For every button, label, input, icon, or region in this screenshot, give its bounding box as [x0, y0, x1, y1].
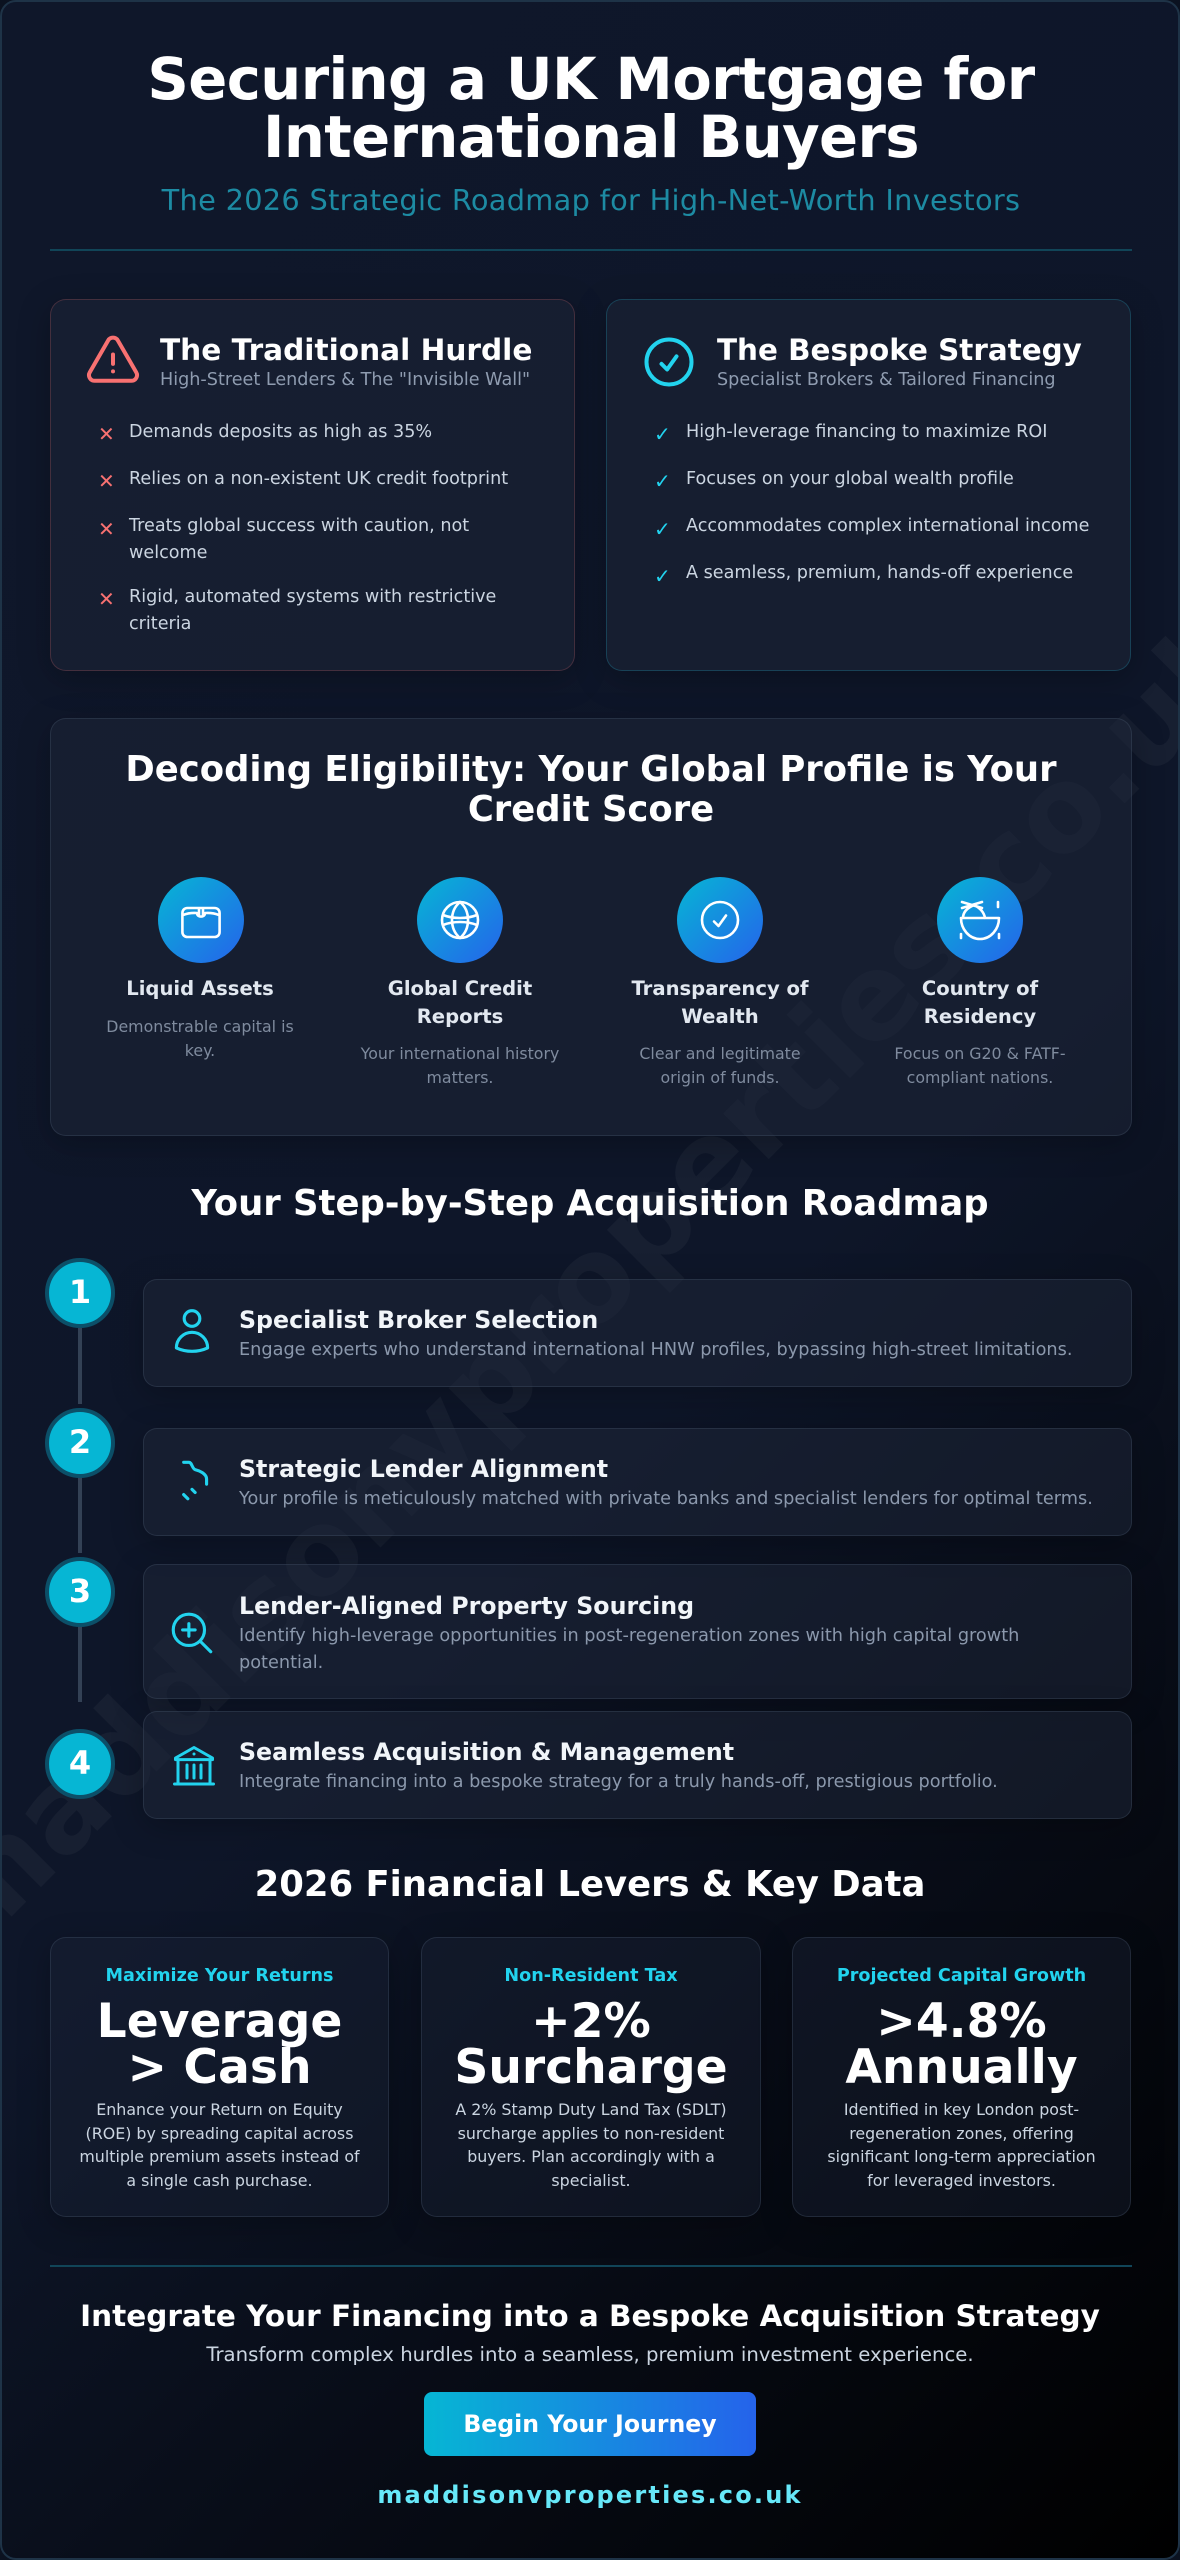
item: liquid assets	[106, 877, 294, 1060]
label: Country of	[922, 977, 1038, 1000]
panel: the traditional hurdle	[50, 299, 575, 671]
item: country of residency	[894, 877, 1066, 1087]
big figure	[454, 1994, 728, 2095]
icon: globe	[417, 877, 503, 963]
description	[455, 2100, 727, 2190]
description: origin of funds.	[660, 1068, 780, 1087]
description: matters.	[427, 1068, 493, 1087]
list: hurdles: Demands deposits as high as 35%	[129, 422, 432, 442]
list: hurdles: ✕	[98, 517, 115, 541]
icon: check circle	[644, 338, 694, 386]
heading: The Bespoke Strategy	[717, 333, 1082, 367]
label: Residency	[924, 1005, 1036, 1028]
description: compliant nations.	[907, 1068, 1053, 1087]
subheading: Specialist Brokers & Tailored Financing	[717, 370, 1056, 390]
description: potential.	[239, 1653, 323, 1673]
step number 4: 4	[69, 1744, 91, 1782]
title	[147, 46, 1035, 171]
list: hurdles: Treats global success with caution, not	[129, 516, 469, 536]
step number 2: 2	[69, 1423, 91, 1461]
description: buyers. Plan accordingly with a	[467, 2147, 715, 2166]
list: strategy: ✓	[654, 422, 671, 446]
description: a single cash purchase.	[126, 2171, 313, 2190]
list: hurdles: criteria	[129, 614, 191, 634]
list: hurdles: ✕	[98, 587, 115, 611]
heading: Integrate Your Financing into a Bespoke Acquisition Strategy	[80, 2299, 1100, 2333]
label: Projected Capital Growth	[837, 1966, 1086, 1986]
description: surcharge applies to non-resident	[458, 2124, 724, 2143]
icon: country	[937, 877, 1023, 963]
list: strategy	[654, 422, 1089, 588]
step number 2	[45, 1408, 115, 1478]
label: Transparency of	[631, 977, 809, 1000]
title: Specialist Broker Selection	[239, 1306, 598, 1334]
list: hurdles: ✕	[98, 422, 115, 446]
list: hurdles: ✕	[98, 469, 115, 493]
description: regeneration zones, offering	[849, 2124, 1074, 2143]
icon: magnifier plus	[172, 1612, 212, 1654]
list: strategy: A seamless, premium, hands-off experience	[686, 563, 1073, 583]
icon: warning triangle	[86, 336, 140, 383]
icon: link fragments	[182, 1460, 208, 1500]
step card 2	[143, 1428, 1132, 1536]
description: key.	[185, 1041, 215, 1060]
list: strategy: ✓	[654, 469, 671, 493]
description	[360, 1044, 559, 1087]
label: Global Credit	[388, 977, 532, 1000]
step number 3: 3	[69, 1572, 91, 1610]
description: Your profile is meticulously matched with private banks and specialist lenders for optimal terms.	[239, 1489, 1093, 1509]
title: Strategic Lender Alignment	[239, 1455, 608, 1483]
button	[424, 2392, 756, 2456]
list: strategy: Focuses on your global wealth profile	[686, 469, 1014, 489]
icon: person	[174, 1309, 210, 1353]
icon: check circle	[677, 877, 763, 963]
label: Liquid Assets	[126, 977, 274, 1000]
description: Clear and legitimate	[639, 1044, 801, 1063]
website url: maddisonvproperties.co.uk	[377, 2481, 803, 2509]
big figure	[97, 1994, 342, 2095]
label: Wealth	[681, 1005, 759, 1028]
description: Demonstrable capital is	[106, 1017, 294, 1036]
stat card: capital growth	[792, 1937, 1131, 2217]
description: Enhance your Return on Equity	[96, 2100, 343, 2119]
big figure: +2%	[531, 1994, 651, 2049]
list: strategy: High-leverage financing to maximize ROI	[686, 422, 1047, 442]
description: multiple premium assets instead of	[79, 2147, 360, 2166]
label: Maximize Your Returns	[105, 1966, 334, 1986]
label: Reports	[417, 1005, 503, 1028]
description	[639, 1044, 801, 1087]
description: specialist.	[551, 2171, 631, 2190]
description: Integrate financing into a bespoke strategy for a truly hands-off, prestigious portfolio.	[239, 1772, 998, 1792]
heading: Credit Score	[468, 789, 714, 830]
subheading: Transform complex hurdles into a seamless, premium investment experience.	[206, 2343, 974, 2366]
big figure: Surcharge	[454, 2040, 728, 2095]
step card 4	[143, 1711, 1132, 1819]
description	[106, 1017, 294, 1060]
description: (ROE) by spreading capital across	[86, 2124, 353, 2143]
list: strategy: ✓	[654, 564, 671, 588]
call to action	[80, 2299, 1100, 2509]
list: strategy: ✓	[654, 517, 671, 541]
stat card: surcharge	[421, 1937, 761, 2217]
step card 3	[143, 1564, 1132, 1699]
step number 1: 1	[69, 1273, 91, 1311]
subtitle: The 2026 Strategic Roadmap for High-Net-Worth Investors	[162, 183, 1020, 217]
title: Seamless Acquisition & Management	[239, 1738, 734, 1766]
label	[631, 977, 809, 1028]
heading: roadmap: Your Step-by-Step Acquisition Roadmap	[191, 1183, 989, 1224]
heading: The Traditional Hurdle	[160, 333, 532, 367]
list: hurdles	[98, 422, 508, 634]
title: International Buyers	[263, 104, 919, 171]
roadmap timeline	[45, 1258, 115, 1799]
item: global credit reports	[360, 877, 559, 1087]
label	[388, 977, 532, 1028]
label	[922, 977, 1038, 1028]
heading: Decoding Eligibility: Your Global Profile is Your	[125, 749, 1057, 790]
big figure: >4.8%	[876, 1994, 1047, 2049]
big figure: Leverage	[97, 1994, 342, 2049]
item: transparency of wealth	[631, 877, 809, 1087]
description: for leveraged investors.	[867, 2171, 1056, 2190]
description: Identified in key London post-	[844, 2100, 1079, 2119]
header	[147, 46, 1035, 217]
big figure: > Cash	[127, 2040, 312, 2095]
description: A 2% Stamp Duty Land Tax (SDLT)	[455, 2100, 727, 2119]
list: strategy: Accommodates complex international income	[686, 516, 1089, 536]
big figure: Annually	[845, 2040, 1078, 2095]
step number 4	[45, 1729, 115, 1799]
heading	[125, 749, 1057, 830]
title: Lender-Aligned Property Sourcing	[239, 1592, 694, 1620]
description	[239, 1626, 1019, 1673]
step number 1	[45, 1258, 115, 1328]
list: hurdles: welcome	[129, 543, 208, 563]
panel: decoding eligibility	[50, 718, 1132, 1136]
description: significant long-term appreciation	[827, 2147, 1096, 2166]
description	[894, 1044, 1066, 1087]
label: Non-Resident Tax	[504, 1966, 678, 1986]
list: hurdles: Relies on a non-existent UK credit footprint	[129, 469, 508, 489]
big figure	[845, 1994, 1078, 2095]
description: Identify high-leverage opportunities in post-regeneration zones with high capital growth	[239, 1626, 1019, 1646]
heading: financial levers: 2026 Financial Levers & Key Data	[255, 1864, 925, 1905]
list: hurdles: Rigid, automated systems with restrictive	[129, 587, 496, 607]
title: Securing a UK Mortgage for	[147, 46, 1035, 113]
panel: the bespoke strategy	[606, 299, 1131, 671]
description: Your international history	[361, 1044, 559, 1063]
step number 3	[45, 1557, 115, 1627]
icon: liquid assets	[158, 877, 244, 963]
button: Begin Your Journey	[463, 2410, 717, 2438]
stat card: leverage	[50, 1937, 389, 2217]
step card 1	[143, 1279, 1132, 1387]
description: Engage experts who understand international HNW profiles, bypassing high-street limitations.	[239, 1340, 1072, 1360]
icon: bank	[173, 1746, 215, 1786]
description	[827, 2100, 1096, 2190]
subheading: High-Street Lenders & The "Invisible Wall"	[160, 370, 530, 390]
description	[79, 2100, 360, 2190]
description: Focus on G20 & FATF-	[894, 1044, 1066, 1063]
